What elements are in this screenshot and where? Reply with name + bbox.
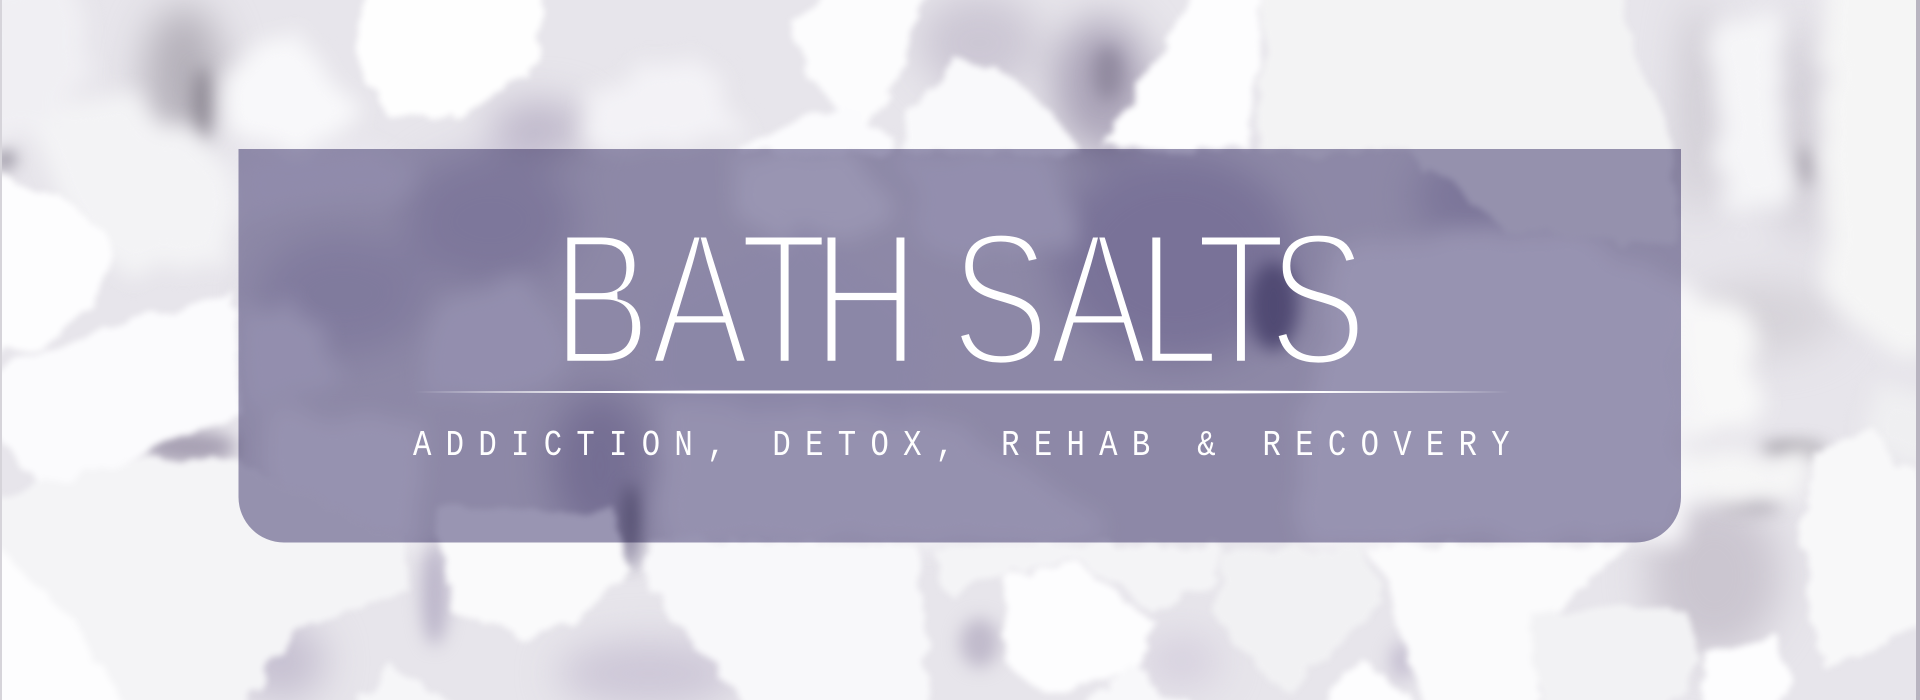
divider rule	[414, 390, 1510, 394]
subtitle: ADDICTION, DETOX, REHAB & RECOVERY	[413, 426, 1524, 467]
title: BATH SALTS	[552, 194, 1367, 406]
panel: translucent purple title band	[238, 149, 1681, 542]
